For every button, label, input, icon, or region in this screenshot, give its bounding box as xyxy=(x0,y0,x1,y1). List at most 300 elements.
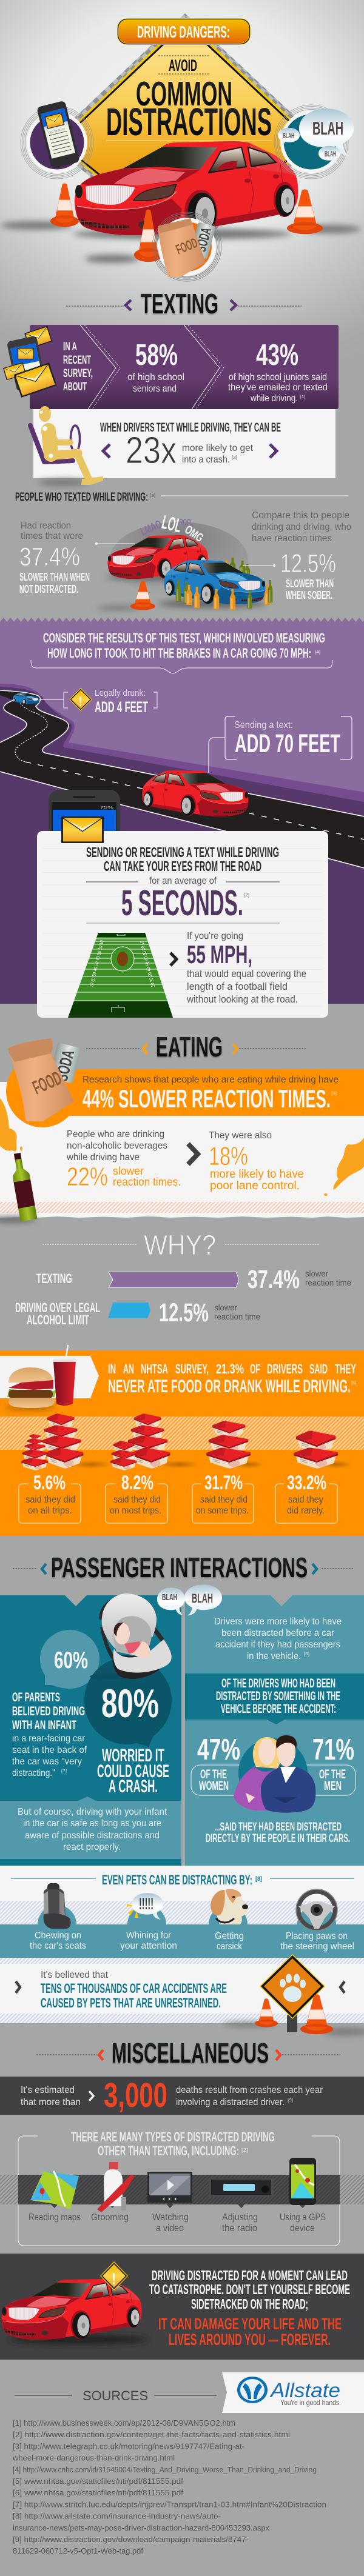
survey intro text: IN A xyxy=(63,340,77,353)
section heading: texting: TEXTING xyxy=(141,288,218,319)
pet captions: the steering wheel xyxy=(280,1941,354,1952)
card heading xyxy=(86,844,279,874)
chevron xyxy=(89,2091,93,2101)
sources list: 811629-060712-v5-Opt1-Web-tag.pdf xyxy=(13,2546,143,2555)
stat: 3000: 3,000 xyxy=(104,2076,167,2115)
stat box: all trips: said they did xyxy=(25,1495,75,1505)
captions: the radio xyxy=(222,2223,257,2234)
sources heading: SOURCES xyxy=(83,2388,148,2403)
text: of parents: [7] xyxy=(61,1769,67,1774)
bubble: 80 percent: 80% xyxy=(101,1681,159,1726)
heading: [2] xyxy=(241,2147,248,2153)
icon: bottle xyxy=(0,1152,38,1223)
test heading xyxy=(43,630,325,661)
stats: women and men: 47% xyxy=(197,1733,240,1766)
stat box: rarely: 33.2% xyxy=(287,1472,326,1493)
stat box: rarely: said they xyxy=(288,1495,323,1505)
band: of the drivers xyxy=(185,1673,364,1724)
survey intro text: ABOUT xyxy=(63,380,87,393)
stat caption: [2] xyxy=(232,456,237,460)
stat: 37.4 percent slower xyxy=(19,521,90,595)
text: 55 mph: that would equal covering the xyxy=(187,969,306,979)
bubble: 60 percent: 60% xyxy=(54,1647,88,1673)
white flag xyxy=(0,1356,99,1398)
caption xyxy=(176,2085,323,2107)
icon: envelope xyxy=(62,817,103,843)
chevron xyxy=(188,1144,198,1164)
survey text: [5] xyxy=(351,1381,356,1386)
red car on road xyxy=(142,770,249,816)
survey text: SAID xyxy=(309,1361,328,1376)
sources list: wheel-more-dangerous-than-drink-driving.html xyxy=(12,2454,175,2462)
sources list: [1] http://www.businessweek.com/ap/2012-06/D9VAN5GO2.htm xyxy=(13,2418,235,2428)
average line: for an average of xyxy=(149,876,217,886)
stat: 18 percent xyxy=(209,1130,304,1192)
panel: infant car seat xyxy=(0,1593,181,1866)
captions: a video xyxy=(156,2223,184,2234)
stat: 22 percent: People who are drinking xyxy=(67,1129,164,1140)
stats: women and men: OF THE xyxy=(200,1767,227,1781)
intro text: Drivers were more likely to have xyxy=(214,1617,342,1627)
captions: Grooming xyxy=(91,2212,129,2223)
stat: 23x: 23x xyxy=(126,430,177,472)
stat: 58 percent: seniors and xyxy=(133,384,177,394)
icon: whining bubble: !!!!! xyxy=(139,1895,153,1913)
icon: phone circle xyxy=(21,101,93,179)
stat box: some trips xyxy=(192,1472,254,1523)
stat box: most trips: 8.2% xyxy=(121,1472,153,1493)
captions: Watching xyxy=(152,2212,189,2223)
containers: 8.2 percent xyxy=(110,1413,200,1470)
text: tens of thousands: It's believed that xyxy=(41,1970,109,1980)
sources list: [5] www.nhtsa.gov/staticfiles/nti/pdf/811555.pdf xyxy=(13,2477,183,2486)
intro text: [6] xyxy=(304,1652,309,1657)
icon: food circle: SODA xyxy=(193,226,215,253)
stat: 12.5 percent slower: Compare this to people xyxy=(252,510,349,521)
captions: Reading maps xyxy=(29,2212,81,2223)
section heading: miscellaneous: MISCELLANEOUS xyxy=(112,2037,269,2069)
survey text: IN xyxy=(108,1361,116,1376)
chevrons xyxy=(103,444,277,458)
football field: 10 20 30 40 50 40 30 20 10 xyxy=(89,939,105,987)
icon: hands logo xyxy=(237,2377,268,2403)
stat box: most trips: on most trips. xyxy=(110,1506,161,1516)
allstate logo xyxy=(222,2372,364,2413)
sources list: insurance-news/pets-may-pose-driver-distraction-hazard-800453293.aspx xyxy=(13,2523,269,2532)
small blue car xyxy=(13,693,39,704)
stat: 22 percent: non-alcoholic beverages xyxy=(67,1141,167,1151)
pet captions: your attention xyxy=(120,1941,177,1951)
panel: NHTSA survey xyxy=(0,1345,364,1536)
eating headline: Research shows that people who are eating while driving have xyxy=(83,1075,339,1085)
stats: women and men xyxy=(197,1733,354,1793)
red car xyxy=(2,2279,149,2344)
stat: 18 percent: more likely to have xyxy=(210,1168,304,1181)
stat box: all trips: on all trips. xyxy=(28,1506,72,1516)
stat caption: more likely to get xyxy=(182,443,254,453)
pet captions: Whining for xyxy=(126,1930,172,1941)
slang words: LMAO xyxy=(138,518,164,539)
eating headline xyxy=(83,1075,339,1113)
stat: 37.4 percent slower: NOT DISTRACTED. xyxy=(19,583,78,595)
red car texting xyxy=(106,535,209,581)
callout: safe driving: But of course, driving with your infant xyxy=(18,1807,167,1817)
stat caption: into a crash. xyxy=(182,455,230,465)
title: avoid: AVOID xyxy=(169,56,197,75)
icon: food circle: FOOD xyxy=(174,235,200,258)
survey text: DRIVERS xyxy=(267,1361,303,1376)
stat: 43 percent: while driving. xyxy=(250,393,298,404)
eating headline: [3] xyxy=(331,1092,337,1096)
text: of parents: in a rear-facing car xyxy=(12,1733,86,1744)
band: 3000 deaths: It's estimated xyxy=(21,2085,75,2095)
stat: 43 percent xyxy=(228,339,328,404)
callout: safe driving: in the car is safe as long as you are xyxy=(23,1818,161,1829)
containers: 5.6 percent xyxy=(21,1413,112,1470)
section heading: eating: EATING xyxy=(156,1031,223,1063)
icon: soda can xyxy=(49,1043,81,1084)
icon: blah bubbles circle xyxy=(274,105,354,179)
bar row: texting: TEXTING xyxy=(36,1271,72,1286)
bar row: alcohol: slower xyxy=(214,1303,237,1312)
icon: blah bubbles circle: BLAH xyxy=(325,150,336,158)
text: worried it could cause a crash xyxy=(97,1746,169,1797)
stat: 12.5 percent slower: WHEN SOBER. xyxy=(286,589,332,601)
survey text xyxy=(108,1361,356,1396)
icon: GPS phone xyxy=(289,2158,316,2205)
cones behind car xyxy=(0,183,361,234)
callout: legally drunk: ADD 4 FEET xyxy=(95,699,148,716)
captions: Using a GPS xyxy=(280,2212,326,2223)
notch xyxy=(271,1595,292,1606)
section: why chart xyxy=(15,1229,351,1327)
callout: legally drunk xyxy=(39,688,157,716)
icon: dog xyxy=(211,1889,248,1924)
callout: sending a text xyxy=(209,716,352,773)
icon domes xyxy=(38,1905,336,1924)
sources list: [2] http://www.distraction.gov/content/get-the-facts/facts-and-statistics.html xyxy=(13,2430,290,2439)
section heading: texting xyxy=(66,288,302,319)
panel: 5 seconds card xyxy=(37,817,328,1018)
icon: envelopes and phone xyxy=(4,326,56,396)
text: worried it could cause a crash: A CRASH. xyxy=(109,1777,158,1797)
captions: Adjusting xyxy=(222,2212,258,2223)
callout: legally drunk: ! xyxy=(79,694,82,709)
text: 55 mph: If you're going xyxy=(187,931,243,941)
title: common distractions: COMMON xyxy=(136,75,232,113)
bar row: alcohol xyxy=(15,1298,260,1327)
torn paper edge xyxy=(0,1213,364,1218)
icon: soda can: SODA xyxy=(52,1048,78,1083)
text: of parents: the car was "very xyxy=(12,1757,82,1767)
sources list: [7] http://www.stritch.luc.edu/depts/injprev/Transprt/tran1-03.htm#Infant%20Distraction xyxy=(13,2500,326,2509)
icon: map xyxy=(30,2171,79,2209)
callout: safe driving: react properly. xyxy=(63,1842,121,1852)
sources list xyxy=(12,2418,326,2555)
icon: big phone: 75% xyxy=(100,806,114,810)
warning sign diamond xyxy=(58,22,312,245)
text: said they had been distracted xyxy=(206,1820,350,1845)
brace xyxy=(31,660,332,673)
panel: pets xyxy=(0,1866,364,2035)
containers: 33.2 percent xyxy=(294,1431,352,1469)
striped bands xyxy=(0,2175,364,2208)
panel: eating stats xyxy=(0,1038,364,1223)
icon: steering wheel xyxy=(296,1889,337,1930)
text: 55 mph: length of a football field xyxy=(187,981,288,992)
orange highlight bar xyxy=(6,1055,364,1127)
captions: device xyxy=(290,2223,315,2234)
icon: food circle xyxy=(152,212,221,281)
text: of parents: distracting." xyxy=(12,1768,55,1778)
top spotlight background xyxy=(0,0,364,436)
icon: big phone xyxy=(49,790,120,844)
icon: blah bubbles circle: BLAH xyxy=(283,132,294,140)
text: tens of thousands: CAUSED BY PETS THAT ARE UNRESTRAINED. xyxy=(41,1995,221,2010)
connector left xyxy=(95,542,135,545)
text: of parents: WITH AN INFANT xyxy=(12,1718,76,1732)
stats: women and men: WOMEN xyxy=(199,1779,229,1793)
panel: drivers with passengers xyxy=(185,1595,364,1866)
checkered band behind sign xyxy=(49,13,322,255)
car shadow xyxy=(73,229,291,239)
stat: 43 percent: [1] xyxy=(300,395,305,399)
stat box: all trips: 5.6% xyxy=(33,1472,66,1493)
text: worried it could cause a crash: WORRIED IT xyxy=(102,1746,164,1766)
sources list: [4] http://www.cnbc.com/id/31545004/Texting_And_Driving_Worse_Than_Drinking_and_Driving xyxy=(13,2465,317,2474)
small cone xyxy=(97,581,155,610)
test heading: [4] xyxy=(315,650,320,655)
icon: crash test dummy xyxy=(30,406,103,486)
pet captions xyxy=(30,1930,354,1952)
stat: 22 percent: slower xyxy=(113,1165,144,1177)
caption: deaths result from crashes each year xyxy=(176,2085,323,2095)
sources list: [3] http://www.telegraph.co.uk/motoring/news/9197747/Eating-at- xyxy=(13,2441,244,2451)
icon: paw sign with cones xyxy=(221,1955,364,2035)
intro text xyxy=(214,1617,342,1661)
containers: 31.7 percent xyxy=(206,1421,264,1469)
stat: 37.4 percent slower: Had reaction xyxy=(21,521,71,531)
pets heading: EVEN PETS CAN BE DISTRACTING BY: xyxy=(102,1872,252,1887)
allstate logo: Allstate xyxy=(269,2379,340,2401)
slang words: ROFL xyxy=(179,517,194,529)
sources list: [6] www.nhtsa.gov/staticfiles/nti/pdf/811555.pdf xyxy=(13,2488,183,2497)
pet captions: Chewing on xyxy=(35,1930,81,1941)
sources list: [9] http://www.distraction.gov/download/campaign-materials/8747- xyxy=(13,2535,249,2544)
bar row: alcohol: ALCOHOL LIMIT xyxy=(27,1312,89,1327)
callout: safe driving: aware of possible distractions and xyxy=(25,1830,160,1841)
caption: [9] xyxy=(288,2098,293,2103)
survey text: AN xyxy=(123,1361,134,1376)
icon: tablet video xyxy=(147,2172,192,2203)
pet captions: Placing paws on xyxy=(286,1931,348,1941)
slang words: LOL xyxy=(160,511,184,537)
middle cone xyxy=(85,209,163,263)
text: of parents xyxy=(12,1690,87,1778)
warning text xyxy=(158,2315,342,2349)
stat: 18 percent: They were also xyxy=(209,1130,272,1141)
stat: 43 percent: 43% xyxy=(256,339,298,372)
stat box: most trips: said they did xyxy=(113,1495,161,1505)
stat: 58 percent xyxy=(127,339,184,394)
subheading: people who texted: [3] xyxy=(150,494,155,498)
icon: infant car seat xyxy=(90,1593,172,1680)
warning sign: ! xyxy=(112,2269,116,2288)
icon: car seat xyxy=(44,1883,71,1929)
callout: safe driving xyxy=(0,1797,181,1859)
warning sign xyxy=(101,2262,127,2290)
text: 55 mph xyxy=(186,931,306,1005)
icons: blah bubbles: BLAH xyxy=(162,1592,177,1603)
pets heading: [8] xyxy=(255,1876,262,1883)
band: 3000 deaths: that more than xyxy=(21,2097,81,2107)
panel: braking test xyxy=(0,618,364,1004)
icon: phone circle: TEXT MESSAGE xyxy=(48,127,66,135)
survey text: OF xyxy=(250,1361,260,1376)
bar row: texting: slower xyxy=(305,1269,328,1278)
stats: women and men: MEN xyxy=(324,1779,342,1793)
pill outline xyxy=(191,1765,356,1795)
stat: 18 percent: poor lane control. xyxy=(210,1180,300,1192)
icon: whining bubble xyxy=(127,1893,163,1920)
icon: food bag: FOOD xyxy=(29,1067,65,1098)
bubble: 60 percent xyxy=(40,1630,99,1689)
hero: title sign xyxy=(0,13,361,281)
icon: radio xyxy=(209,2178,274,2197)
stat: 58 percent: 58% xyxy=(135,339,178,372)
bar row: alcohol: 12.5% xyxy=(159,1298,209,1327)
stat: 18 percent: 18% xyxy=(209,1142,248,1171)
stat box: most trips xyxy=(106,1472,167,1523)
text: 55 mph: 55 MPH, xyxy=(187,940,252,969)
stat box: some trips: on some trips. xyxy=(196,1506,249,1516)
heading xyxy=(71,2129,275,2158)
heading: why: WHY? xyxy=(144,1229,216,1261)
chevron xyxy=(170,953,177,966)
survey text: NHTSA xyxy=(141,1361,168,1376)
panel: other distractions xyxy=(0,2129,364,2246)
pill: driving dangers: DRIVING DANGERS: xyxy=(137,22,230,41)
blue car with bottles xyxy=(158,558,275,610)
callout: sending a text: Sending a text: xyxy=(234,720,293,730)
slang words xyxy=(138,511,206,545)
icon: burger and drink xyxy=(5,1345,76,1410)
football field: 10 20 30 40 50 40 30 20 10 xyxy=(139,939,156,988)
red car xyxy=(75,141,298,235)
survey intro text xyxy=(63,340,93,393)
pet captions: Getting xyxy=(215,1931,244,1941)
sources list: [8] http://www.allstate.com/insurance-industry-news/auto- xyxy=(13,2512,221,2520)
band: 3000 deaths xyxy=(0,2076,364,2115)
icons: blah bubbles xyxy=(157,1584,222,1616)
stat box: all trips xyxy=(19,1472,81,1523)
stat caption xyxy=(182,443,254,465)
road xyxy=(0,690,364,868)
captions xyxy=(29,2212,326,2234)
survey text: SURVEY, xyxy=(175,1361,209,1376)
stat: 12.5 percent slower: 12.5% xyxy=(280,549,336,578)
text: tens of thousands xyxy=(16,1970,345,2010)
heading: OTHER THAN TEXTING, INCLUDING: xyxy=(98,2143,239,2158)
stat: 22 percent: reaction times. xyxy=(113,1176,181,1188)
stat: 5 seconds xyxy=(86,883,280,923)
pet captions: carsick xyxy=(217,1941,243,1952)
subheading: people who texted xyxy=(15,490,348,504)
callout: legally drunk: Legally drunk: xyxy=(95,688,146,698)
intro text: been distracted before a car xyxy=(221,1628,335,1638)
text: worried it could cause a crash: COULD CAUSE xyxy=(97,1761,169,1781)
panel: 23 times more likely xyxy=(33,409,335,478)
stat: 12.5 percent slower xyxy=(252,510,351,601)
text: tens of thousands: TENS OF THOUSANDS OF CAR ACCIDENTS ARE xyxy=(41,1981,227,1996)
stat: 22 percent: 22% xyxy=(67,1163,108,1192)
cars spotlight xyxy=(110,522,248,597)
icon: blah bubbles circle: BLAH xyxy=(312,118,343,139)
text: of parents: OF PARENTS xyxy=(12,1690,60,1704)
bar row: texting: reaction time xyxy=(305,1278,351,1287)
bar row: texting: 37.4% xyxy=(248,1265,300,1294)
stat box: some trips: said they did xyxy=(200,1495,248,1505)
stat: 5 seconds: [2] xyxy=(244,892,249,898)
stat: 5 seconds: 5 SECONDS. xyxy=(121,883,243,923)
text: of parents: seat in the back of xyxy=(12,1745,87,1755)
stat: 22 percent xyxy=(66,1129,181,1192)
bar row: texting xyxy=(36,1265,351,1294)
icon: splashes xyxy=(0,1098,364,1196)
intro text: accident if they had passengers xyxy=(215,1640,340,1650)
bar row: alcohol: DRIVING OVER LEGAL xyxy=(15,1300,100,1315)
stat: 37.4 percent slower: SLOWER THAN WHEN xyxy=(19,571,90,583)
stat: 43 percent: of high school juniors said xyxy=(229,372,327,382)
title: avoid xyxy=(158,56,210,75)
section heading: eating xyxy=(86,1031,306,1063)
message text xyxy=(149,2267,350,2312)
stat: 58 percent: of high school xyxy=(127,372,184,382)
caption: involving a distracted driver. xyxy=(176,2097,285,2107)
allstate logo: You're in good hands. xyxy=(280,2398,341,2407)
title: common distractions xyxy=(106,75,272,144)
stat box: rarely: did rarely. xyxy=(287,1506,325,1516)
survey intro text: SURVEY, xyxy=(63,367,93,380)
intro text: in the vehicle. xyxy=(247,1651,301,1661)
text: 55 mph: without looking at the road. xyxy=(186,994,298,1005)
stat: 43 percent: they've emailed or texted xyxy=(228,382,328,393)
icon: food bag xyxy=(8,1038,74,1121)
stat: 12.5 percent slower: drinking and driving, who xyxy=(252,522,351,532)
panel: survey stats xyxy=(30,325,339,409)
survey text: 21.3% xyxy=(216,1361,244,1376)
icon: couple xyxy=(234,1735,315,1813)
bar row: alcohol: reaction time xyxy=(214,1312,260,1321)
slang words: OMG xyxy=(182,523,206,545)
subheading: people who texted: PEOPLE WHO TEXTED WHILE DRIVING: xyxy=(15,490,148,504)
bubble: 80 percent xyxy=(84,1657,172,1747)
band: closing message xyxy=(0,2254,364,2360)
stat: 37.4 percent slower: 37.4% xyxy=(19,542,80,572)
stat: 12.5 percent slower: have reaction times xyxy=(252,533,332,544)
notch xyxy=(65,1595,87,1606)
icons: blah bubbles: BLAH xyxy=(192,1592,213,1606)
stat: 37.4 percent slower: times that were xyxy=(21,531,83,541)
pill: driving dangers xyxy=(118,19,250,44)
text: of parents: BELIEVED DRIVING xyxy=(12,1704,85,1718)
stat box: some trips: 31.7% xyxy=(204,1472,243,1493)
pet captions: the car's seats xyxy=(30,1941,86,1951)
survey intro text: RECENT xyxy=(63,353,91,367)
icon: bottle and comb xyxy=(97,2162,135,2212)
stat: 22 percent: while driving have xyxy=(66,1152,140,1163)
stat box: rarely xyxy=(275,1472,337,1523)
